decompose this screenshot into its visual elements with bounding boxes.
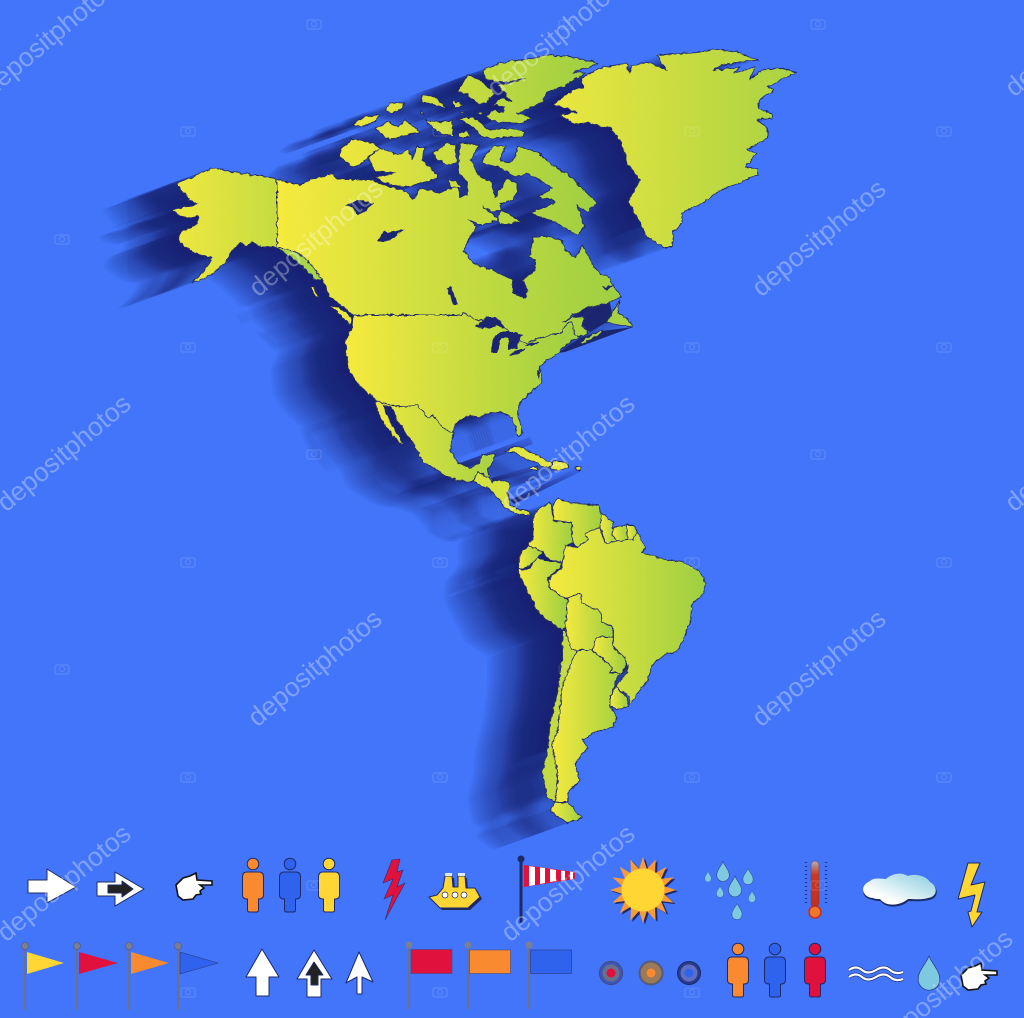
Central America xyxy=(473,472,533,518)
icon: yellow person xyxy=(318,858,340,912)
lakes and inlets xyxy=(345,200,615,509)
icon: outlined up arrow xyxy=(297,950,332,997)
Suriname xyxy=(612,525,627,542)
icon: blue person (lower row) xyxy=(764,943,786,997)
Paraguay xyxy=(592,637,626,673)
map: North America xyxy=(172,49,797,518)
icon: sun xyxy=(610,857,678,924)
watermark text: depositphotos xyxy=(242,603,387,732)
icon: blue target xyxy=(678,962,700,984)
icon: red target xyxy=(600,962,622,984)
Tierra del Fuego xyxy=(550,802,582,823)
icon: white up arrow xyxy=(246,949,279,996)
watermark text: depositphotos xyxy=(243,173,388,302)
Canada xyxy=(277,143,621,343)
Newfoundland and Nova Scotia xyxy=(580,300,633,344)
icon: blue person xyxy=(280,858,300,912)
map: South America xyxy=(518,498,706,823)
Chile xyxy=(542,630,577,802)
watermark text: depositphotos xyxy=(746,603,891,732)
Ecuador xyxy=(518,545,542,568)
icon: pointing hand xyxy=(176,873,212,900)
icon: large water drop xyxy=(918,956,940,990)
icon: red person xyxy=(804,943,826,997)
icon: yellow pennant xyxy=(22,942,64,1010)
Uruguay xyxy=(610,687,628,709)
United States xyxy=(345,313,580,437)
icon: orange person (lower row) xyxy=(728,943,748,997)
dark Gulf of St Lawrence and Atlantic shadow xyxy=(558,303,633,353)
shadow rods across the Gulf and Caribbean xyxy=(460,437,580,504)
Venezuela xyxy=(552,498,602,547)
icon: white right arrow xyxy=(28,869,76,903)
long motion-blur shadow of the landmass xyxy=(97,50,794,850)
icon: cloud xyxy=(863,874,936,906)
icon: pointing hand (lower row) xyxy=(961,963,997,990)
Brazil xyxy=(548,528,706,707)
French Guiana xyxy=(627,525,638,540)
watermark text: depositphotos xyxy=(746,173,891,302)
Mexico xyxy=(375,401,495,482)
icon: rain drops xyxy=(705,862,756,920)
Guyana xyxy=(600,513,617,543)
icon: red lightning bolt xyxy=(383,859,405,920)
Alaska xyxy=(172,167,277,282)
icon: ship xyxy=(429,873,482,910)
icon: red rectangular flag xyxy=(406,942,452,1009)
icon: orange rectangular flag xyxy=(464,942,510,1009)
Greenland xyxy=(553,49,797,247)
Caribbean islands xyxy=(505,446,582,471)
icon: water waves xyxy=(849,968,903,980)
Canadian Arctic islands xyxy=(311,55,598,325)
Bolivia xyxy=(565,593,613,650)
Peru xyxy=(518,558,568,630)
icon: yellow lightning bolt xyxy=(958,863,985,927)
icon: orange person xyxy=(242,858,264,912)
Colombia xyxy=(528,502,573,570)
icon: red pennant xyxy=(74,942,118,1010)
icon: blue rectangular flag xyxy=(526,942,572,1009)
icon: orange pennant xyxy=(126,942,169,1010)
icon: blue pennant xyxy=(174,942,218,1010)
icon: slim up arrow xyxy=(346,952,373,994)
watermark text: depositphotos xyxy=(495,818,640,947)
watermark text: depositphotos xyxy=(495,388,640,517)
icon: outlined right arrow xyxy=(97,872,144,906)
icon: orange target xyxy=(640,962,662,984)
icon: windsock xyxy=(518,856,575,923)
Alaska panhandle xyxy=(277,247,323,280)
icon: thermometer xyxy=(806,861,826,918)
Argentina xyxy=(552,650,628,802)
